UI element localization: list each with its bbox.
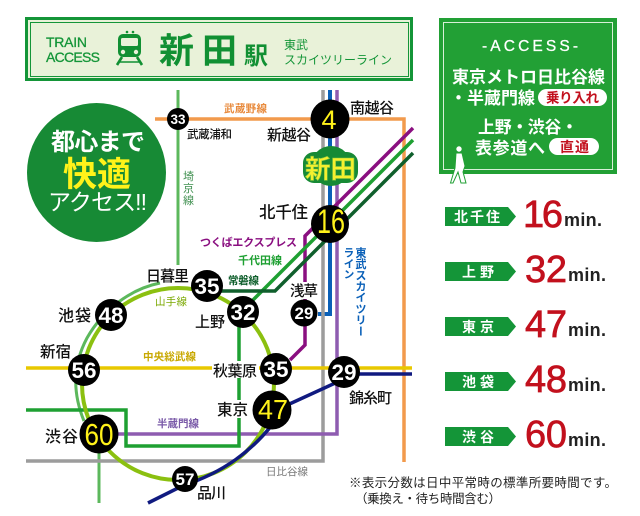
line labels [143,102,308,478]
line: Chiyoda [26,140,413,446]
station names: 池袋 [58,307,91,325]
icon: walking person [450,146,466,183]
route text: 東京メトロ日比谷線 [452,68,605,87]
station: Tokyo 47: 47 [258,394,288,425]
line: Hibiya [26,90,323,461]
badge: direct [549,138,599,155]
line: Saikyo [76,90,178,503]
callout: comfortable access: アクセス!! [48,189,147,215]
station names: 錦糸町 [349,389,392,407]
station names: 渋谷 [45,428,78,446]
station: Shinagawa 57: 57 [176,470,194,489]
line labels: 線 [183,194,194,207]
station: Kinshicho 29: 29 [332,360,356,385]
route text: ・半蔵門線 [450,89,535,108]
line labels: 中央総武線 [143,350,196,363]
station: Kita-Senju 16 [311,203,349,243]
row: Ueno 32 min: 上野 [462,264,494,280]
badge: direct: 直通 [560,139,589,155]
row: Ikebukuro 48 min: 池袋 [462,374,494,390]
station: Ikebukuro 48: 48 [98,303,124,328]
station names: 武蔵浦和 [187,128,232,141]
station: Akihabara 35 [260,353,292,385]
footnote [349,475,617,506]
station: Kinshicho 29 [328,356,360,388]
label: Tobu Skytree Line vertical [342,246,367,337]
row: Ikebukuro 48 min: 48 [525,359,567,401]
station: Shinagawa 57 [172,466,198,492]
row: Ueno 32 min [445,249,606,291]
line: Tobu Skytree [318,90,330,314]
line labels: 日比谷線 [266,465,308,478]
line labels: 京 [183,182,194,195]
station name [159,32,268,71]
callout: comfortable access: 都心まで [51,129,145,156]
row: Shibuya 60 min [445,414,606,456]
line labels: 常磐線 [228,274,260,287]
station: Kita-Senju 16: 16 [317,203,345,241]
line: Hanzomon [118,90,337,434]
station: Shin-Koshigaya 4: 4 [321,105,337,135]
line: Chuo Sobu [26,366,412,370]
line name: スカイツリーライン [284,53,392,67]
line: Musashino [155,119,404,462]
header banner [26,18,412,80]
station: Tokyo 47 [252,390,292,430]
line labels: 武蔵野線 [224,102,268,115]
station: Shibuya 60: 60 [84,417,114,452]
station: Asakusa 29 [290,300,318,326]
line labels: 山手線 [155,295,188,308]
line labels: 千代田線 [238,253,282,267]
label: Tobu Skytree Line vertical: ライン [342,247,354,279]
row: Tokyo 47 min [445,304,606,346]
station names: 南越谷 [350,100,394,117]
line: Joban [215,153,413,291]
panel: access [439,18,617,174]
icon: train [117,31,142,65]
station: Musashi-Urawa 33: 33 [170,112,186,127]
station: Ueno 32 [227,296,259,328]
station names: 日暮里 [146,268,189,285]
station name: 田 [202,32,237,71]
station: Shinjuku 56 [68,354,100,386]
row: Kita-Senju 16 min [445,194,602,236]
station: Nippori 35 [191,270,223,302]
station names: 新越谷 [267,127,311,144]
train access label: TRAIN [46,34,87,50]
station marker: Shinden [303,146,358,186]
station name: 駅 [244,43,268,70]
route map [26,90,413,503]
travel times list [445,194,606,456]
row: Kita-Senju 16 min: 北千住 [454,209,500,225]
station: Ikebukuro 48 [95,299,127,331]
station names: 秋葉原 [213,363,257,380]
row: Ueno 32 min: min. [568,265,606,285]
row: Tokyo 47 min: min. [568,320,606,340]
row: Shibuya 60 min: min. [568,430,606,450]
footnote: （乗換え・待ち時間含む） [355,492,501,506]
train access label: ACCESS [46,49,100,65]
station: Shinjuku 56: 56 [72,358,96,383]
station: Asakusa 29: 29 [295,304,313,323]
station names: 浅草 [290,283,318,300]
line labels: つくばエクスプレス [200,235,297,249]
row: Kita-Senju 16 min: min. [564,210,602,230]
line labels: 埼 [183,169,194,183]
row: Tokyo 47 min: 47 [525,304,567,346]
row: Shibuya 60 min: 60 [525,414,567,456]
callout: comfortable access: 快適 [63,156,131,194]
line name [284,38,392,67]
row: Kita-Senju 16 min: 16 [523,194,563,236]
access heading: -ACCESS- [482,38,578,55]
route text: 上野・渋谷・ [478,118,578,137]
station label backgrounds [212,282,319,418]
row: Tokyo 47 min: 東京 [462,319,494,335]
station names: 上野 [195,314,225,331]
station names: 品川 [197,485,226,502]
footnote: ※表示分数は日中平常時の標準所要時間です。 [349,475,617,490]
station: Musashi-Urawa 33 [167,108,189,130]
badge: transfer: 乗り入れ [546,90,600,106]
line: Oedo [148,374,412,503]
badge: transfer [538,89,607,106]
row: Ikebukuro 48 min: min. [568,375,606,395]
route text [450,68,605,158]
row: Ueno 32 min: 32 [525,249,567,291]
station: Nippori 35: 35 [194,274,220,299]
station names: 北千住 [259,203,308,222]
callout: comfortable access [27,103,166,242]
station names: 新宿 [40,343,71,361]
line: Tsukuba Express [290,128,413,360]
station: Ueno 32: 32 [230,300,256,325]
line name: 東武 [284,38,308,52]
route text: 表参道へ [475,139,545,158]
train access label [46,34,100,65]
line labels: 半蔵門線 [157,417,200,430]
station marker: Shinden: 新田 [305,156,356,184]
label: Tobu Skytree Line vertical: 東武スカイツリー [354,246,367,337]
station: Shin-Koshigaya 4 [310,100,350,138]
row: Shibuya 60 min: 渋谷 [462,429,494,445]
station name: 新 [159,32,194,71]
row: Ikebukuro 48 min [445,359,606,401]
station: Akihabara 35: 35 [264,357,288,382]
station names [40,100,394,502]
station names: 東京 [217,401,248,419]
line: Yamanote [82,288,274,480]
